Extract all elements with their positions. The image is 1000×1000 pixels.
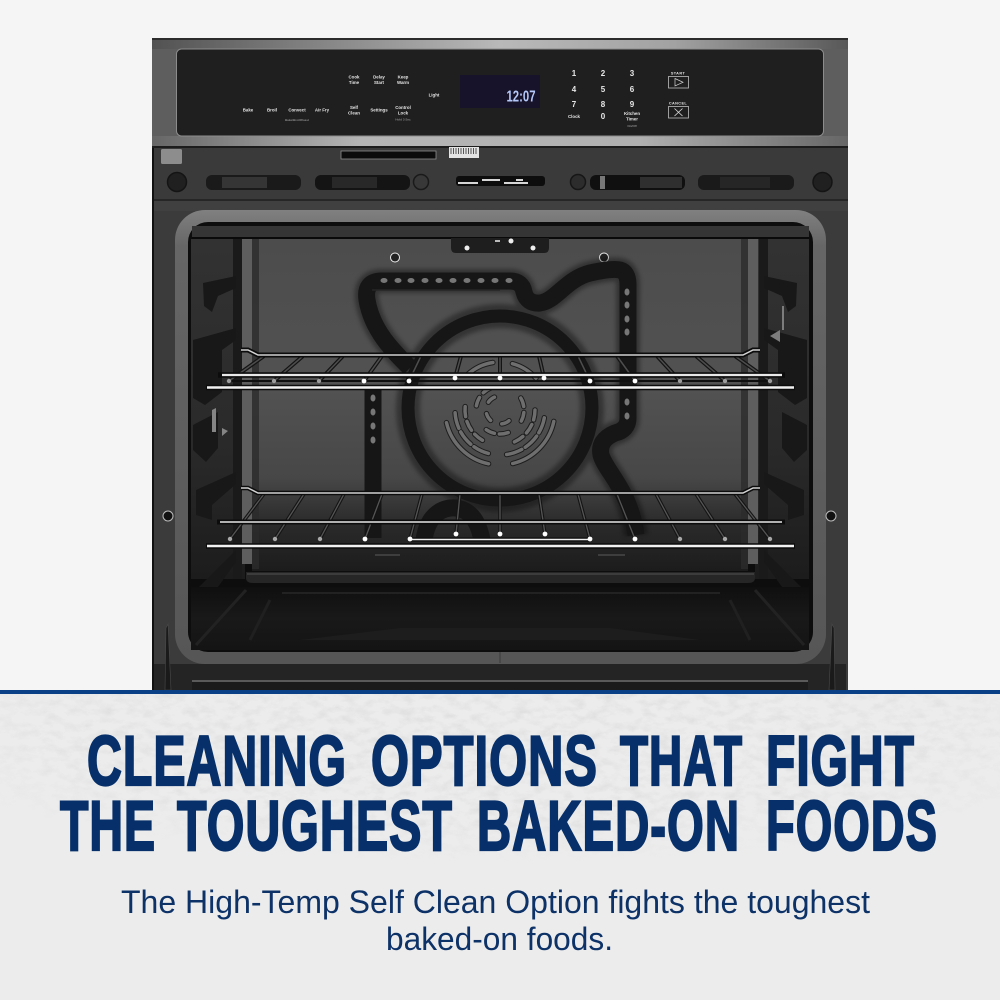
control panel labels: Warm: [397, 80, 409, 85]
description text: baked-on foods.: [386, 921, 613, 957]
door seal and cavity: [175, 210, 826, 664]
title: BAKED-ON: [477, 786, 740, 865]
rack supports left: [193, 276, 236, 605]
convection fan cover: [432, 342, 568, 478]
front frame with vents: [152, 147, 848, 690]
number keypad: 0: [601, 112, 606, 121]
control panel labels: [243, 74, 440, 122]
number keypad: Clock: [568, 114, 581, 119]
control panel labels: Convect: [288, 108, 306, 112]
control panel labels: Broil: [267, 108, 277, 112]
rack guide glints left: [212, 408, 228, 436]
lower oven rack: [206, 488, 795, 546]
number keypad: 5: [601, 85, 606, 94]
control panel labels: Lock: [398, 110, 409, 116]
control panel labels: Start: [374, 80, 385, 85]
rack supports right: [764, 276, 807, 605]
number keypad: [568, 69, 640, 128]
control panel labels: Clean: [348, 110, 360, 116]
number keypad: 9: [630, 100, 635, 109]
control panel labels: Delay: [373, 74, 385, 80]
oven body: [152, 38, 848, 690]
number keypad: Kitchen: [624, 111, 640, 116]
control panel labels: Bake: [243, 108, 254, 112]
number keypad: 6: [630, 85, 635, 94]
page background: [0, 0, 1000, 690]
number keypad: 2: [601, 69, 606, 78]
title: THAT: [620, 721, 743, 800]
clock display: 12:07: [506, 88, 536, 106]
number keypad: 1: [572, 69, 577, 78]
top bracket and screws: [390, 238, 608, 262]
lower door frame: [154, 624, 846, 690]
fan ring element: [408, 316, 592, 500]
start and cancel buttons: CANCEL: [669, 102, 687, 106]
control panel labels: Light: [429, 92, 440, 98]
control panel labels: Time: [349, 80, 360, 85]
number keypad: Timer: [626, 116, 638, 122]
description text: The High-Temp Self Clean Option fights the toughest: [121, 884, 870, 920]
oven side walls: [191, 239, 809, 579]
control panel labels: Keep: [398, 74, 409, 80]
title: FIGHT: [766, 721, 915, 800]
side screws: [163, 511, 836, 521]
description text: [121, 884, 870, 957]
upper oven rack: [206, 350, 795, 388]
element vent holes: [370, 278, 630, 444]
control strip: [152, 38, 848, 148]
start and cancel buttons: [668, 72, 688, 118]
title: CLEANING: [87, 721, 347, 800]
control panel labels: Self: [350, 105, 359, 110]
clock display: [460, 75, 540, 108]
control panel labels: Settings: [370, 108, 388, 112]
number keypad: 7: [572, 100, 577, 109]
text panel background: [0, 694, 1000, 1000]
title: TOUGHEST: [177, 786, 453, 865]
oven photograph: [152, 38, 848, 690]
rack guide glints right: [770, 306, 784, 342]
control panel labels: Bake/Broil/Roast: [285, 118, 309, 122]
title: THE: [60, 786, 156, 865]
start and cancel buttons: START: [671, 72, 685, 76]
blue divider bar: [0, 690, 1000, 694]
control panel labels: Cook: [349, 74, 360, 80]
title: [60, 721, 938, 865]
number keypad: 8: [601, 100, 606, 109]
back wall: [246, 239, 755, 583]
number keypad: 4: [572, 85, 577, 94]
control panel labels: Air Fry: [315, 108, 330, 112]
oven floor: [191, 587, 809, 650]
heating element tube: [367, 269, 636, 540]
control panel labels: Hold 3 Sec: [395, 118, 411, 122]
control panel labels: Control: [395, 105, 411, 110]
title: OPTIONS: [371, 721, 598, 800]
number keypad: On/Off: [627, 124, 637, 128]
number keypad: 3: [630, 69, 635, 78]
